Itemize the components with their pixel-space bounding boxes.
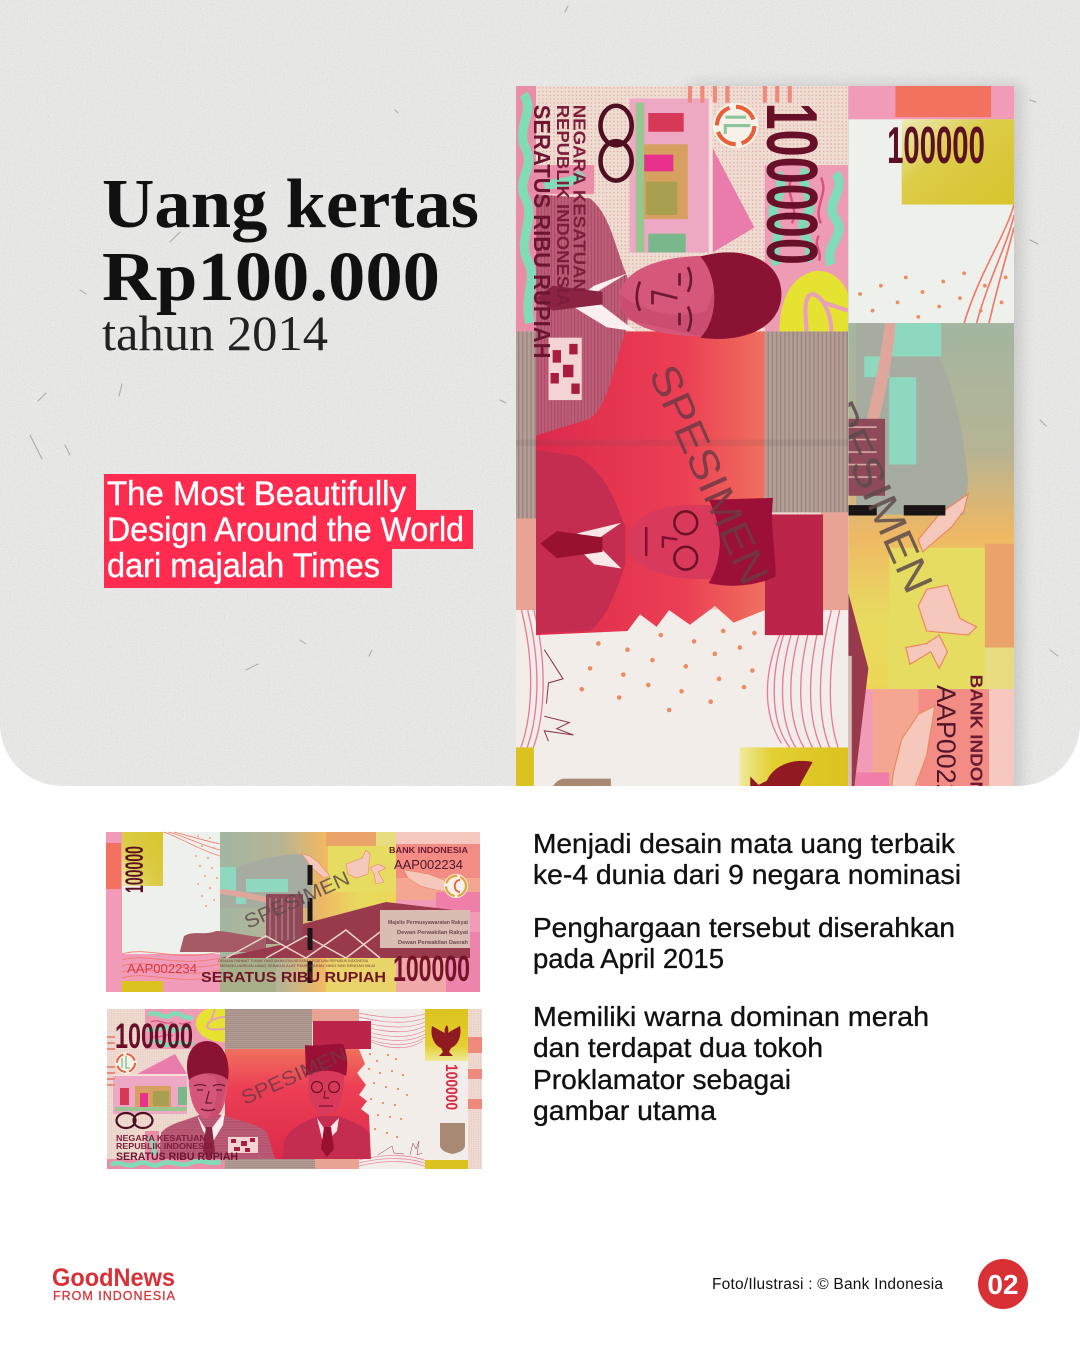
note caption: REPUBLIK INDONESIA bbox=[116, 1141, 213, 1151]
specimen overprint: SPESIMEN bbox=[241, 868, 353, 934]
note caption: NEGARA KESATUAN bbox=[116, 1133, 206, 1143]
signatures bbox=[544, 650, 573, 741]
dark red square bbox=[765, 514, 823, 635]
numerals and serials bbox=[121, 845, 470, 989]
text block: award date bbox=[533, 912, 955, 974]
portrait: Hatta bbox=[536, 450, 776, 633]
text block: ranking: ke-4 dunia dari 9 negara nominasi bbox=[533, 859, 961, 890]
numerals and serials: 100000 bbox=[688, 683, 772, 843]
legal text: DENGAN RAHMAT TUHAN YANG MAHA ESA NEGARA KESATUAN REPUBLIK INDONESIA bbox=[218, 959, 369, 963]
scatter dots bbox=[369, 1054, 407, 1137]
large banknote, rotated, back half bbox=[848, 86, 1014, 786]
shield emblem bbox=[553, 778, 611, 786]
vertical denomination: 100000 bbox=[638, 783, 734, 822]
page number badge: 02 bbox=[987, 1269, 1019, 1300]
parliament building: Majelis Permusyawaratan Rakyat bbox=[388, 920, 468, 926]
small banknote: front bbox=[107, 1009, 482, 1169]
denomination numerals: 100000 bbox=[115, 1017, 193, 1056]
note caption: SERATUS RIBU RUPIAH bbox=[529, 105, 555, 358]
text block: ranking bbox=[533, 828, 961, 890]
numerals and serials: 100000 bbox=[393, 948, 470, 989]
logo: GoodNews from Indonesia: FROM INDONESIA bbox=[53, 1289, 176, 1303]
note caption bbox=[116, 1133, 238, 1163]
numerals and serials: AAP002234 bbox=[127, 961, 197, 976]
note caption: REPUBLIK INDONESIA bbox=[553, 105, 573, 307]
logo bbox=[877, 789, 927, 839]
note caption: NEGARA KESATUAN bbox=[569, 105, 589, 292]
legal text: MENGELUARKAN UANG SEBAGAI ALAT PEMBAYARAN YANG SAH DENGAN NILAI bbox=[731, 323, 738, 646]
note caption: SERATUS RIBU RUPIAH bbox=[116, 1151, 238, 1163]
parliament building bbox=[180, 894, 470, 958]
title: Rp100.000 bbox=[102, 239, 440, 316]
parliament building: Dewan Perwakilan Daerah bbox=[398, 940, 469, 946]
numerals and serials: BANK INDONESIA bbox=[966, 675, 986, 839]
text block: design description: Proklamator sebagai bbox=[533, 1064, 791, 1095]
portrait: Hatta bbox=[282, 1044, 370, 1159]
specimen overprint: SPESIMEN bbox=[640, 358, 779, 591]
specimen overprint: SPESIMEN bbox=[804, 366, 943, 600]
security thread bbox=[848, 505, 946, 516]
central colour field bbox=[848, 323, 1014, 690]
panel: textured grey header background bbox=[0, 0, 1080, 794]
parliament building: Dewan Perwakilan Daerah bbox=[778, 693, 790, 839]
signatures bbox=[378, 1141, 422, 1155]
numerals and serials: AAP002234 bbox=[394, 857, 463, 872]
text block: design description: gambar utama bbox=[533, 1095, 716, 1126]
parliament building: Dewan Perwakilan Rakyat bbox=[799, 691, 811, 839]
numerals and serials: AAP002234 bbox=[715, 130, 745, 275]
numerals and serials bbox=[848, 126, 984, 786]
map of Indonesia bbox=[889, 494, 977, 806]
legal text: DENGAN RAHMAT TUHAN YANG MAHA ESA NEGARA KESATUAN REPUBLIK INDONESIA bbox=[742, 319, 749, 632]
house illustration bbox=[107, 1037, 189, 1114]
map of Indonesia bbox=[302, 850, 452, 892]
subtitle: tahun 2014 bbox=[102, 305, 328, 361]
numerals and serials: SERATUS RIBU RUPIAH bbox=[695, 284, 730, 668]
house illustration bbox=[630, 86, 790, 257]
callout: highlighted award text: The Most Beautifully bbox=[107, 475, 406, 513]
scatter dots bbox=[860, 273, 1006, 317]
legal text bbox=[218, 959, 375, 968]
text block: design description: Memiliki warna dominan merah bbox=[533, 1001, 929, 1032]
page number badge bbox=[978, 1259, 1028, 1309]
portrait: Sukarno bbox=[159, 1041, 275, 1159]
small banknote: back bbox=[106, 832, 480, 992]
large banknote, rotated, front half bbox=[516, 86, 848, 786]
parliament building: Dewan Perwakilan Rakyat bbox=[397, 930, 468, 936]
double-zero rings bbox=[116, 1113, 152, 1128]
logo: GoodNews from Indonesia: GoodNews bbox=[52, 1264, 175, 1292]
specimen overprint: SPESIMEN bbox=[238, 1044, 350, 1110]
denomination numerals: 100000 bbox=[751, 103, 832, 265]
logo bbox=[444, 874, 468, 898]
logo bbox=[713, 103, 759, 148]
text block: award date: Penghargaan tersebut diserahkan bbox=[533, 912, 955, 943]
title bbox=[102, 166, 479, 316]
callout: highlighted award text: dari majalah Times bbox=[107, 547, 380, 585]
numerals and serials: 100000 bbox=[121, 846, 149, 893]
vertical denomination: 100000 bbox=[442, 1064, 461, 1110]
double-zero rings bbox=[600, 106, 632, 181]
numerals and serials: BANK INDONESIA bbox=[389, 845, 468, 855]
title: Uang kertas bbox=[102, 166, 479, 243]
red centre block bbox=[536, 331, 765, 635]
logo: GoodNews from Indonesia bbox=[52, 1264, 176, 1303]
numerals and serials: SERATUS RIBU RUPIAH bbox=[201, 969, 386, 986]
photo credit: Foto/Ilustrasi : © Bank Indonesia bbox=[712, 1276, 943, 1293]
right colour blocks bbox=[854, 689, 1014, 786]
logo bbox=[115, 1052, 137, 1074]
callout: highlighted award text: Design Around the World bbox=[107, 511, 464, 549]
mustard block with garuda bbox=[516, 747, 848, 786]
mustard numeral block bbox=[902, 119, 1014, 205]
parliament building bbox=[848, 418, 885, 786]
mustard block with garuda bbox=[425, 1009, 468, 1169]
numerals and serials: 100000 bbox=[887, 117, 985, 175]
text block: ranking: Menjadi desain mata uang terbaik bbox=[533, 828, 956, 859]
text block: design description: dan terdapat dua tokoh bbox=[533, 1032, 823, 1063]
text block: design description bbox=[533, 1001, 929, 1126]
security thread bbox=[308, 865, 312, 983]
shield emblem bbox=[440, 1123, 465, 1154]
legal text: MENGELUARKAN UANG SEBAGAI ALAT PEMBAYARAN YANG SAH DENGAN NILAI bbox=[220, 964, 375, 968]
portrait: Sukarno bbox=[536, 194, 781, 435]
legal text bbox=[731, 319, 749, 646]
scatter dots bbox=[582, 631, 754, 710]
callout: highlighted award text bbox=[104, 474, 473, 588]
parliament building: Majelis Permusyawaratan Rakyat bbox=[820, 673, 832, 839]
text block: award date: pada April 2015 bbox=[533, 943, 724, 974]
note caption bbox=[534, 105, 586, 357]
numerals and serials: AAP002234 bbox=[931, 685, 961, 829]
